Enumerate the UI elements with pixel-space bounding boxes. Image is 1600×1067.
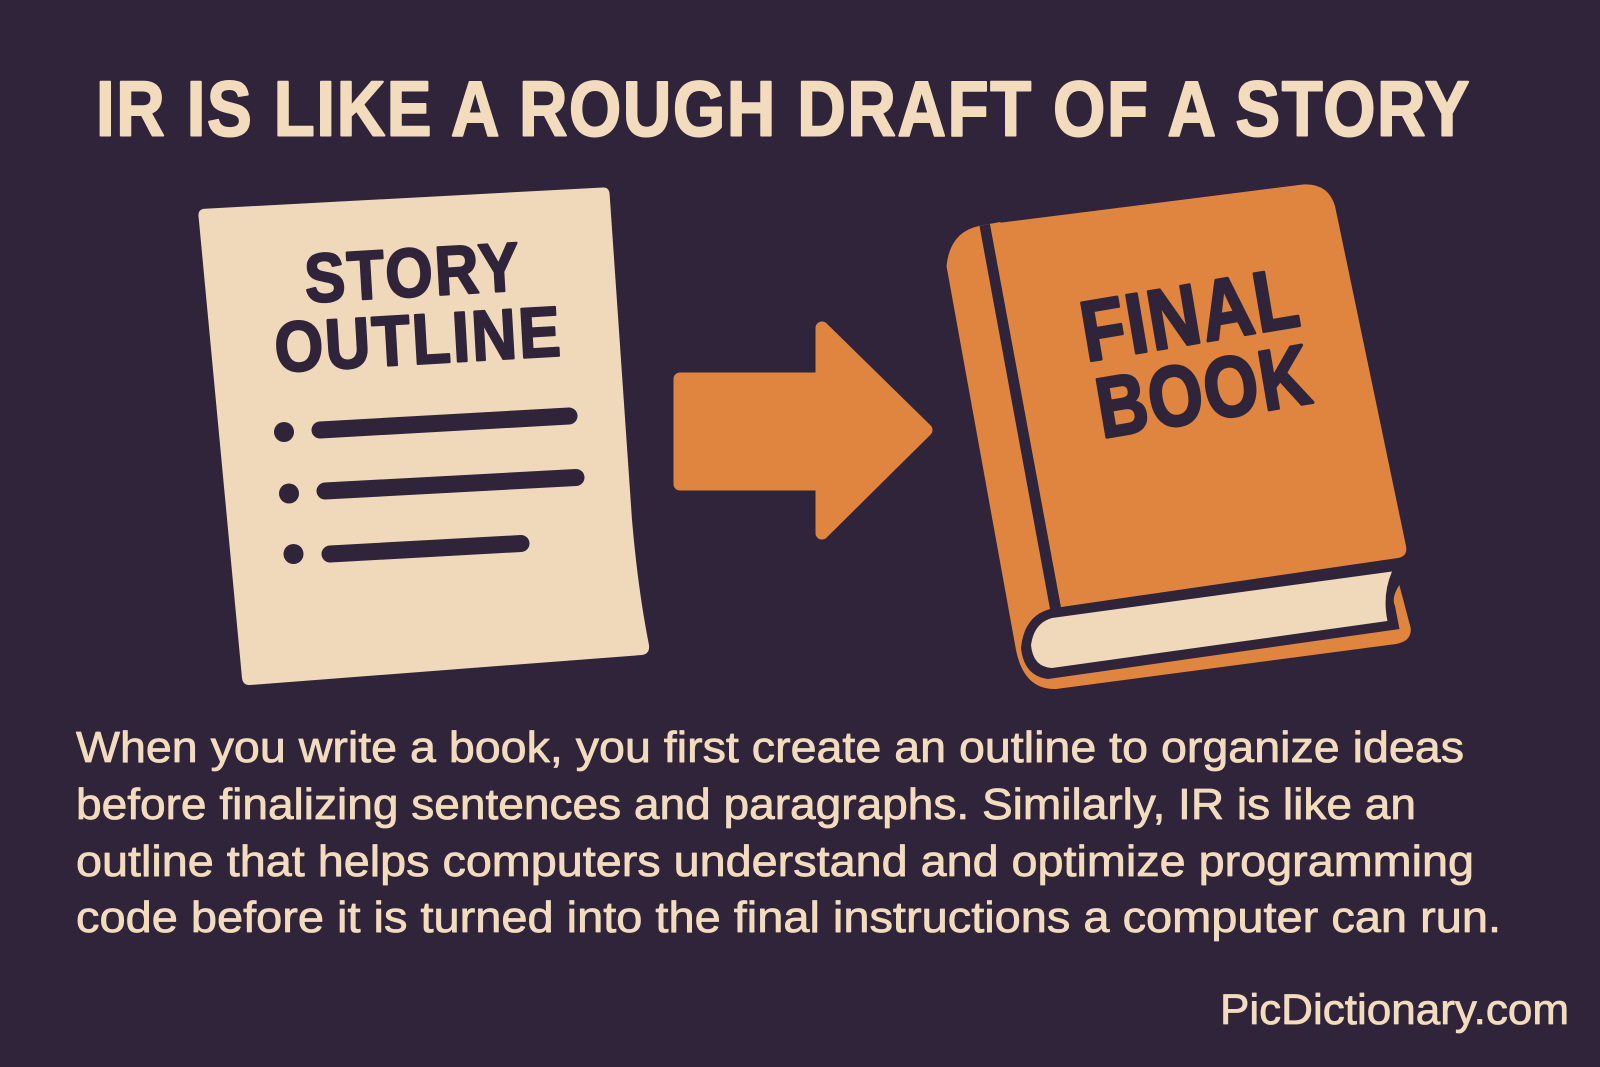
book spine and back cover <box>946 222 1411 689</box>
page sheet <box>198 187 649 685</box>
bullet list <box>274 416 576 564</box>
panel: final book <box>946 184 1411 689</box>
front cover <box>990 184 1406 607</box>
body text: outline that helps computers understand and optimize programming <box>76 837 1474 886</box>
body text: before finalizing sentences and paragraphs. Similarly, IR is like an <box>76 780 1416 829</box>
page heading: STORY <box>302 228 521 317</box>
page heading: OUTLINE <box>272 292 562 388</box>
book title: BOOK <box>1089 328 1317 456</box>
body text: code before it is turned into the final instructions a computer can run. <box>76 893 1501 942</box>
body text: When you write a book, you first create an outline to organize ideas <box>76 723 1464 772</box>
page heading <box>272 228 562 388</box>
gutter and page outline <box>980 224 1406 679</box>
arrow <box>680 328 926 533</box>
book title: FINAL <box>1074 249 1305 380</box>
pages <box>1031 572 1392 668</box>
body text <box>76 723 1501 942</box>
watermark: PicDictionary.com <box>1220 986 1569 1034</box>
book title <box>1074 249 1317 456</box>
title: IR IS LIKE A ROUGH DRAFT OF A STORY <box>96 66 1469 153</box>
panel: story outline page <box>198 187 649 685</box>
